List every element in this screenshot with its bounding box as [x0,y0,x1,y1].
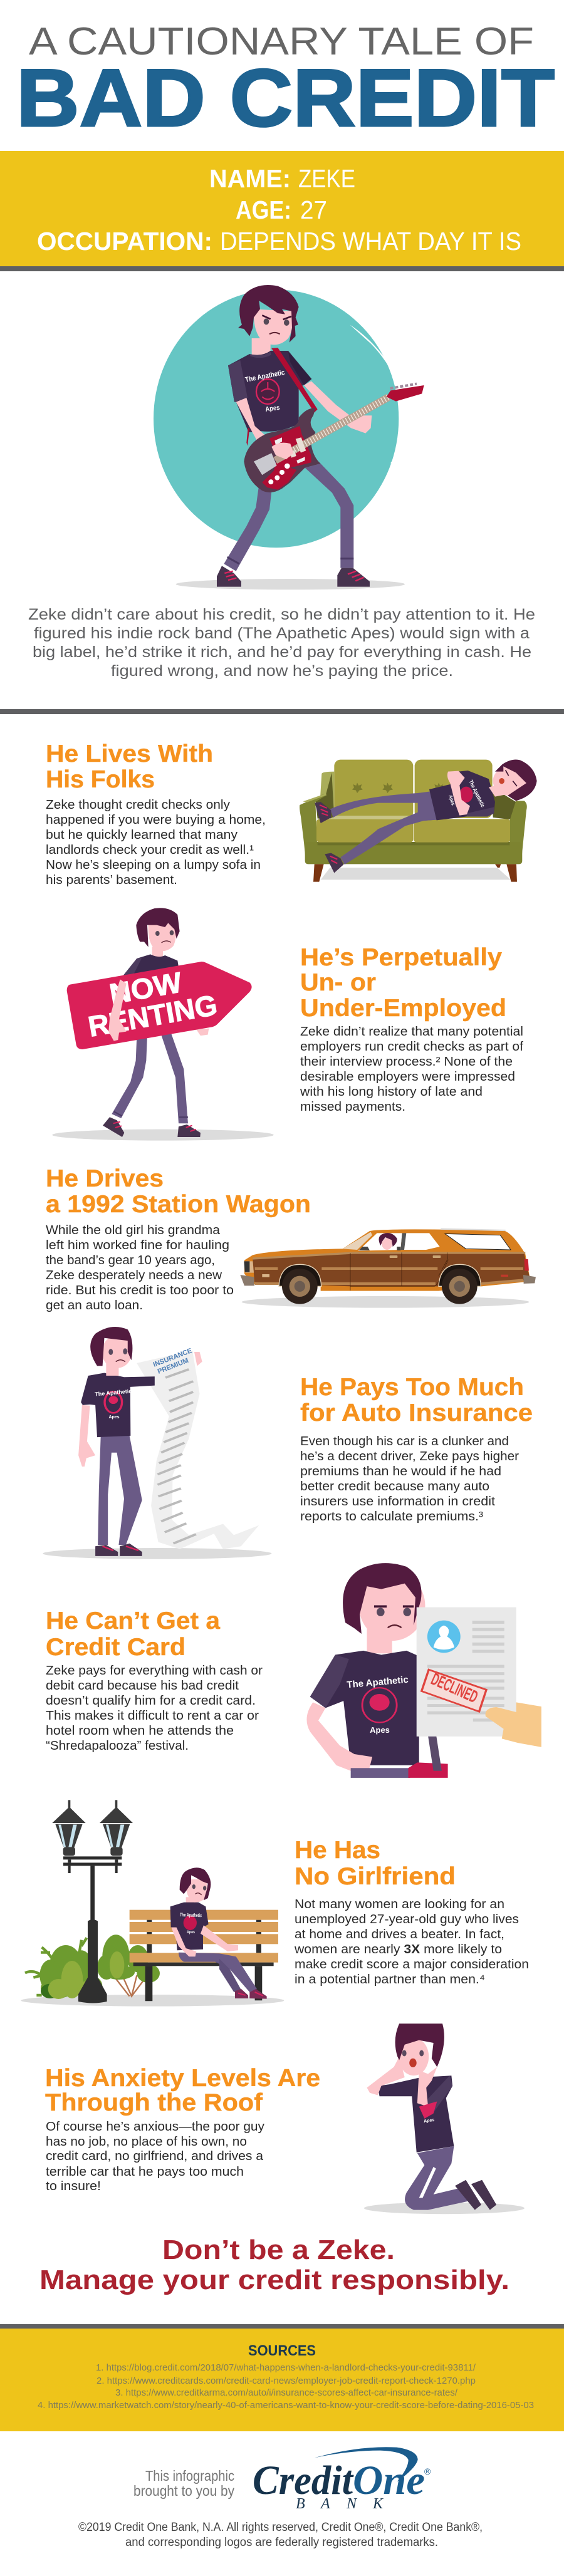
panel: sources: 3. https://www.creditkarma.com/auto/i/insurance-scores-affect-car-insurance-rates/ [115,2387,458,2398]
text: He Pays Too Much for Auto Insurance: He Pays Too Much [300,1374,524,1401]
text: He Pays Too Much for Auto Insurance [300,1374,533,1524]
text: He Drives a 1992 Station Wagon [46,1165,311,1312]
text: He Can't Get a Credit Card: He Can’t Get a [46,1607,220,1634]
text: He Lives With His Folks: his parents’ basement. [46,873,177,887]
logo: Credit One Bank: Credit [253,2458,354,2503]
sponsor credit [133,2468,234,2499]
text: He Drives a 1992 Station Wagon: a 1992 Station Wagon [46,1191,311,1218]
illustration: Zeke carrying a now renting sign: NOW [107,965,185,1010]
text: He Has No Girlfriend: No Girlfriend [295,1863,456,1890]
text: He's Perpetually Un- or Under-Employed: Zeke didn’t realize that many potential [300,1025,523,1039]
intro paragraph: big label, he’d strike it rich, and he’d pay for everything in cash. He [33,643,531,661]
text: He Lives With His Folks: He Lives With [46,740,213,767]
logo: Credit One Bank: One [353,2458,425,2503]
text: He Drives a 1992 Station Wagon: While the old girl his grandma [46,1223,221,1237]
text: He Pays Too Much for Auto Insurance: he’s a decent driver, Zeke pays higher [300,1450,519,1463]
text: He Has No Girlfriend: He Has [295,1837,380,1864]
text: He Has No Girlfriend: unemployed 27-year-old guy who lives [295,1913,519,1926]
text: He Can't Get a Credit Card: doesn’t qualify him for a credit card. [46,1694,256,1708]
text: His Anxiety Levels Are Through the Roof [45,2065,320,2193]
closing message [39,2235,509,2295]
text: He Drives a 1992 Station Wagon: left him worked fine for hauling [46,1239,229,1252]
text: He Can't Get a Credit Card: “Shredapalooza” festival. [46,1739,189,1753]
copyright notice: and corresponding logos are federally registered trademarks. [125,2536,438,2549]
sponsor credit: This infographic [145,2468,234,2484]
text: He's Perpetually Un- or Under-Employed: desirable employers were impressed [300,1070,515,1084]
text: His Anxiety Levels Are Through the Roof: credit card, no girlfriend, and drives a [46,2149,264,2163]
intro paragraph: figured wrong, and now he’s paying the price. [111,662,453,680]
banner: character profile: ZEKE [298,164,355,193]
text: He Has No Girlfriend: in a potential partner than men.⁴ [295,1973,485,1987]
logo: Credit One Bank: ® [424,2466,431,2476]
illustration: Zeke on the sofa: Apes [447,794,456,806]
illustration: Zeke carrying a now renting sign: RENTING [86,989,220,1043]
panel: sources: SOURCES [248,2342,316,2359]
text: He Lives With His Folks: but he quickly learned that many [46,828,238,842]
illustration: Zeke holding an insurance bill: PREMIUM [157,1357,190,1376]
text: He Lives With His Folks: Now he’s sleeping on a lumpy sofa in [46,858,261,872]
panel: sources: 1. https://blog.credit.com/2018/07/what-happens-when-a-landlord-checks-your-credit-93811/ [96,2362,476,2373]
intro paragraph: Zeke didn’t care about his credit, so he didn’t pay attention to it. He [28,606,535,623]
text: He's Perpetually Un- or Under-Employed: employers run credit checks as part of [300,1040,523,1054]
text: He Can't Get a Credit Card: This makes it difficult to rent a car or [46,1709,259,1723]
title [16,20,555,143]
illustration: Zeke with guitar: The Apathetic [244,369,286,384]
text: He's Perpetually Un- or Under-Employed: Un- or [300,969,376,996]
text: He Pays Too Much for Auto Insurance: premiums than he would if he had [300,1465,501,1478]
text: His Anxiety Levels Are Through the Roof: Of course he’s anxious—the poor guy [46,2120,264,2134]
text: He Can't Get a Credit Card: Zeke pays for everything with cash or [46,1664,263,1678]
illustration: anxious Zeke on his knees: Apes [424,2118,435,2124]
illustration: declined application: Apes [370,1725,390,1735]
text: His Anxiety Levels Are Through the Roof: terrible car that he pays too much [46,2165,244,2179]
text: He Drives a 1992 Station Wagon: ride. But his credit is too poor to [46,1284,234,1297]
text: He Pays Too Much for Auto Insurance: better credit because many auto [300,1480,489,1493]
illustration: Zeke holding an insurance bill: Apes [108,1415,120,1420]
logo: Credit One Bank: BANK [296,2496,384,2512]
text: He Has No Girlfriend [294,1837,529,1987]
text: He Drives a 1992 Station Wagon: Zeke desperately needs a new [46,1269,222,1282]
banner: character profile: AGE: [236,195,291,224]
banner: character profile: DEPENDS WHAT DAY IT IS [220,227,521,256]
sponsor credit: brought to you by [133,2483,234,2499]
panel: sources: 2. https://www.creditcards.com/credit-card-news/employer-job-credit-report-check-1270.php [97,2376,476,2386]
illustration: Zeke with guitar [154,285,424,589]
illustration: Zeke carrying a now renting sign [52,908,274,1141]
text: He Drives a 1992 Station Wagon: get an auto loan. [46,1299,143,1312]
text: He Can't Get a Credit Card: Credit Card [46,1634,185,1661]
text: He's Perpetually Un- or Under-Employed [300,944,523,1114]
banner: character profile: OCCUPATION: [37,227,212,256]
text: He Has No Girlfriend: women are nearly 3X more likely to [294,1943,502,1956]
text: He Pays Too Much for Auto Insurance: Even though his car is a clunker and [300,1435,509,1448]
banner: character profile [0,151,564,271]
closing message: Don’t be a Zeke. [162,2235,395,2265]
text: He's Perpetually Un- or Under-Employed: missed payments. [300,1100,405,1114]
text: He's Perpetually Un- or Under-Employed: their interview process.² None of the [300,1055,513,1069]
title: A CAUTIONARY TALE OF [29,20,534,63]
text: His Anxiety Levels Are Through the Roof: to insure! [46,2179,101,2193]
banner: character profile: NAME: [209,164,291,193]
banner: character profile: 27 [300,195,327,224]
illustration: Zeke on the sofa: The Apathetic [467,779,486,808]
illustration: Zeke on a park bench: Apes [187,1931,196,1935]
text: He's Perpetually Un- or Under-Employed: with his long history of late and [300,1085,483,1099]
text: He Lives With His Folks: His Folks [46,766,155,793]
text: He Has No Girlfriend: at home and drives a beater. In fact, [295,1928,504,1941]
illustration: Zeke on a park bench [21,1800,284,2007]
text: He Lives With His Folks: happened if you were buying a home, [46,813,266,827]
illustration: declined application: DECLINED [428,1670,481,1707]
logo: Credit One Bank [253,2447,431,2512]
illustration: Zeke holding an insurance bill [43,1327,271,1559]
text: He Pays Too Much for Auto Insurance: insurers use information in credit [300,1495,495,1509]
text: He Has No Girlfriend: Not many women are looking for an [295,1898,504,1911]
illustration: declined application: The Apathetic [347,1675,409,1690]
illustration: Zeke on the sofa [300,759,537,882]
illustration: Zeke on a park bench: The Apathetic [180,1912,202,1918]
text: He Lives With His Folks: Zeke thought credit checks only [46,798,230,812]
text: He Can't Get a Credit Card: debit card because his bad credit [46,1679,239,1693]
illustration: declined application [306,1563,541,1778]
text: He's Perpetually Un- or Under-Employed: Under-Employed [300,995,506,1022]
illustration: Zeke with guitar: Apes [265,404,280,413]
text: He Pays Too Much for Auto Insurance: reports to calculate premiums.³ [300,1510,483,1524]
text: He Lives With His Folks [46,740,266,887]
illustration: Zeke holding an insurance bill: INSURANCE [152,1347,193,1369]
text: He Lives With His Folks: landlords check your credit as well.¹ [46,843,254,857]
illustration: station wagon [240,1229,536,1308]
text: He's Perpetually Un- or Under-Employed: He’s Perpetually [300,944,502,971]
text: He Has No Girlfriend: make credit score a major consideration [295,1958,529,1971]
illustration: Zeke holding an insurance bill: The Apathetic [95,1388,132,1398]
text: His Anxiety Levels Are Through the Roof: has no job, no place of his own, no [46,2135,247,2149]
intro paragraph: figured his indie rock band (The Apathetic Apes) would sign with a [34,625,530,642]
title: BAD CREDIT [16,52,555,143]
text: He Can't Get a Credit Card [46,1607,263,1753]
text: His Anxiety Levels Are Through the Roof: Through the Roof [45,2089,263,2116]
copyright notice: ©2019 Credit One Bank, N.A. All rights reserved, Credit One®, Credit One Bank®, [78,2521,483,2534]
text: He Can't Get a Credit Card: hotel room when he attends the [46,1724,234,1738]
copyright notice [78,2521,483,2549]
text: He Drives a 1992 Station Wagon: the band’s gear 10 years ago, [46,1254,215,1267]
intro paragraph [28,606,535,680]
text: He Drives a 1992 Station Wagon: He Drives [46,1165,164,1192]
illustration: anxious Zeke on his knees [364,2023,525,2214]
panel: sources [0,2324,564,2431]
text: His Anxiety Levels Are Through the Roof: His Anxiety Levels Are [45,2065,320,2092]
panel: sources: 4. https://www.marketwatch.com/story/nearly-40-of-americans-want-to-know-your-credit-score-before-dating-2016-05-03 [38,2400,534,2411]
text: He Pays Too Much for Auto Insurance: for Auto Insurance [300,1400,533,1426]
closing message: Manage your credit responsibly. [39,2265,509,2295]
